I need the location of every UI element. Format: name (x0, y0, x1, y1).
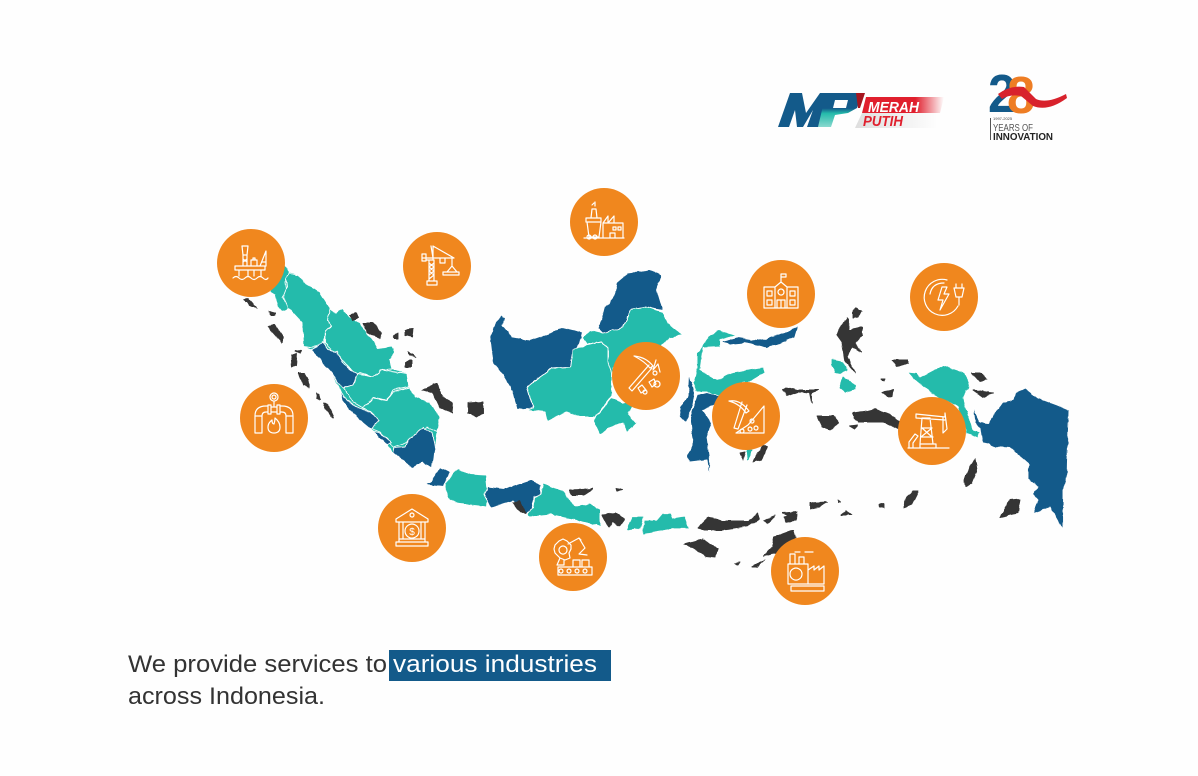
caption line 1: We provide services to (128, 651, 387, 678)
logo: 28 years of innovation (988, 64, 1067, 143)
logo MERAH band (862, 97, 944, 113)
region: Papua (908, 365, 1069, 530)
icon: factory and mine cart (570, 188, 638, 256)
numeral 8: 8 (1007, 67, 1035, 125)
region: Java (425, 467, 622, 527)
highlight bar (389, 650, 611, 681)
logo red swash (856, 93, 865, 108)
logo text MERAH: MERAH (868, 99, 920, 116)
region: Lesser Sunda Islands (602, 513, 797, 567)
islands: west of Sumatra and Riau (243, 298, 483, 418)
years of: YEARS OF (993, 122, 1033, 134)
icon: oil pump jack (898, 397, 966, 465)
divider (990, 118, 991, 140)
icon: power generator factory (771, 537, 839, 605)
logo wordmark P (818, 93, 861, 127)
icon: bank with dollar: $ (409, 527, 415, 538)
logo PUTIH band (855, 113, 940, 128)
icon: offshore oil rig (217, 229, 285, 297)
icon: green electricity plug (910, 263, 978, 331)
icon: bank with dollar (378, 494, 446, 562)
icon: gas pipeline with flame (240, 384, 308, 452)
logo wordmark M (778, 93, 832, 127)
innovation: INNOVATION (993, 132, 1053, 143)
caption line 2: across Indonesia. (128, 683, 325, 710)
icon: robotic arm conveyor (539, 523, 607, 591)
logo: MP Merah Putih (778, 93, 944, 130)
numeral 2: 2 (988, 64, 1016, 124)
logo text PUTIH: PUTIH (863, 113, 904, 130)
years label: 1997-2025 (993, 116, 1013, 121)
region: Maluku (783, 308, 993, 517)
icon: pickaxe with ore (612, 342, 680, 410)
region: Sumatra (270, 262, 440, 468)
ribbon (998, 87, 1067, 108)
icon: pickaxe and rock slope (712, 382, 780, 450)
region: Kalimantan (490, 270, 683, 435)
highlighted words: various industries (393, 651, 597, 678)
icon: tower crane (403, 232, 471, 300)
caption (128, 650, 611, 710)
map: Indonesia (243, 262, 1069, 567)
region: Sulawesi (679, 325, 798, 478)
icon: school building (747, 260, 815, 328)
